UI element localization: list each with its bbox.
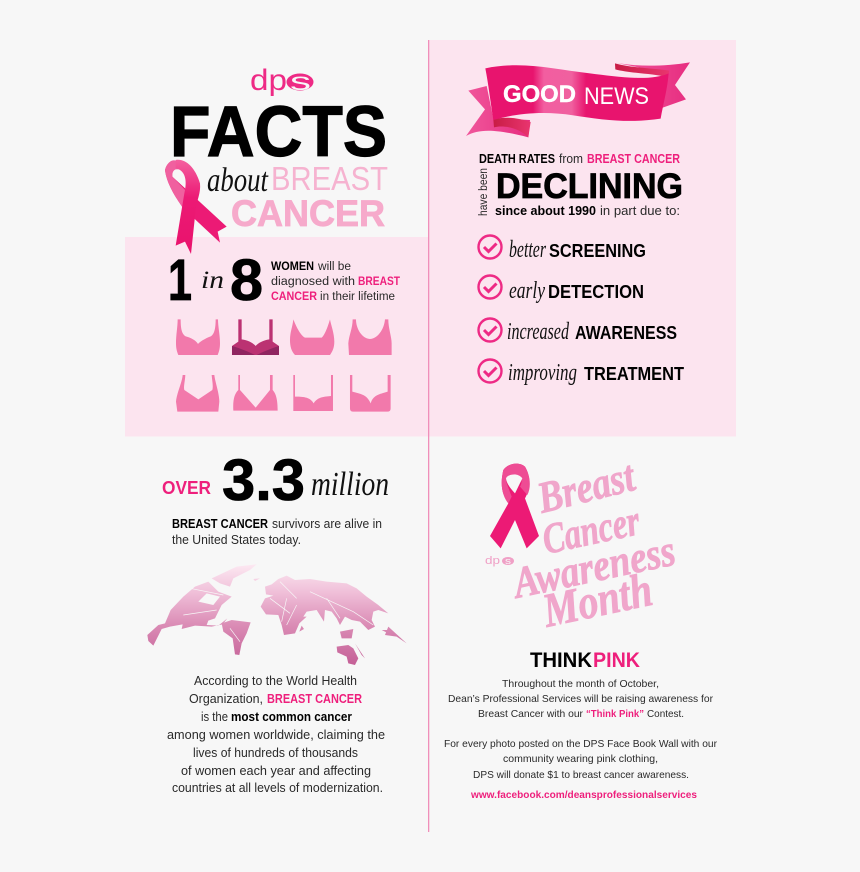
statistic: 1 in 8: 1 <box>168 248 192 313</box>
checklist: early detection: DETECTION <box>548 282 644 302</box>
logo: small dps <box>485 555 514 567</box>
subtitle: about breast cancer: about <box>207 162 269 199</box>
statistic: 1 in 8: 8 <box>230 248 263 313</box>
icon: bra 4 <box>348 319 392 355</box>
text: think pink contest: DPS will donate $1 to breast cancer awareness. <box>473 769 689 781</box>
checklist: early detection <box>478 276 644 304</box>
icon: bra 7 <box>293 375 333 411</box>
text: since about 1990: in part due to: <box>600 203 680 218</box>
lettering: breast cancer awareness month: Awareness <box>506 526 679 608</box>
text: world health organization paragraph <box>167 674 385 795</box>
statistic: 1 in 8: in <box>201 267 224 294</box>
text: think pink contest: Throughout the month of October, <box>502 678 659 690</box>
text: world health organization paragraph: lives of hundreds of thousands <box>193 746 358 760</box>
subtitle: about breast cancer <box>207 160 388 234</box>
icon: bra 3 <box>290 319 334 355</box>
heading: think pink: PINK <box>593 649 640 672</box>
subtitle: about breast cancer: BREAST <box>271 160 388 197</box>
title: FACTS: FACTS <box>170 93 387 172</box>
text: think pink contest: For every photo posted on the DPS Face Book Wall with our <box>444 738 717 750</box>
checklist: improving treatment: TREATMENT <box>584 364 684 384</box>
world map <box>147 564 407 665</box>
banner: good news ribbon: GOOD <box>503 81 576 108</box>
logo: small dps: s <box>505 556 512 566</box>
checklist: increased awareness: increased <box>507 319 570 345</box>
icons: eight bras <box>176 319 392 412</box>
link: facebook url: www.facebook.com/deansprofessionalservices <box>470 789 697 801</box>
text: women will be diagnosed: diagnosed with <box>271 276 355 288</box>
text: think pink contest: Dean’s Professional Services will be raising awareness for <box>448 693 713 705</box>
banner: good news ribbon: NEWS <box>584 83 649 110</box>
text: death rates from breast cancer: BREAST CANCER <box>587 151 681 166</box>
text: world health organization paragraph: According to the World Health <box>194 674 357 688</box>
icon: bra 8 <box>350 375 391 412</box>
vertical divider line <box>428 40 429 832</box>
text: since about 1990 <box>495 203 680 218</box>
text: since about 1990: since about 1990 <box>495 203 596 218</box>
text: women will be diagnosed: in their lifetime <box>320 291 395 303</box>
text: think pink contest <box>444 678 717 781</box>
text: world health organization paragraph: is the <box>201 710 228 724</box>
text: world health organization paragraph: most common cancer <box>231 710 352 724</box>
text: women will be diagnosed <box>271 261 400 303</box>
banner: good news ribbon <box>466 62 690 137</box>
text: think pink contest: Breast Cancer with our <box>478 708 583 720</box>
checklist: better screening: SCREENING <box>549 241 646 261</box>
logo: dps <box>250 64 314 97</box>
panel: good news background <box>428 40 736 436</box>
lettering: breast cancer awareness month: Breast <box>532 451 641 523</box>
heading: think pink: THINK <box>530 649 592 672</box>
text: world health organization paragraph: BREAST CANCER <box>267 692 362 706</box>
text: world health organization paragraph: Organization, <box>189 692 263 706</box>
subtitle: about breast cancer: CANCER <box>231 193 385 234</box>
icon: large pink ribbon <box>165 160 227 254</box>
checklist: increased awareness: AWARENESS <box>575 323 677 343</box>
logo: small dps: dp <box>485 555 500 567</box>
text: death rates from breast cancer <box>479 151 681 166</box>
logo: dps: dp <box>250 64 287 97</box>
text: death rates from breast cancer: from <box>559 151 583 166</box>
icon: bra 1 <box>176 319 220 355</box>
icon: bra 5 <box>176 375 219 412</box>
text: survivors <box>172 517 382 547</box>
checklist: increased awareness <box>478 318 677 345</box>
icon: bra 6 <box>233 375 278 411</box>
heading: DECLINING: DECLINING <box>496 167 683 206</box>
lettering: breast cancer awareness month: Month <box>537 563 657 638</box>
checklist: improving treatment: improving <box>508 360 577 386</box>
text: women will be diagnosed: BREAST <box>358 276 400 288</box>
text: world health organization paragraph: countries at all levels of modernization. <box>172 781 383 795</box>
logo: dps: s <box>290 68 311 96</box>
lettering: breast cancer awareness month <box>506 451 679 638</box>
checklist: improving treatment <box>478 360 684 386</box>
text: women will be diagnosed: CANCER <box>271 291 318 303</box>
checklist: early detection: early <box>509 278 545 304</box>
text: think pink contest: Contest. <box>647 708 684 720</box>
icon: bra 2 <box>232 319 279 355</box>
text: women will be diagnosed: WOMEN <box>271 261 314 273</box>
text: survivors: BREAST CANCER <box>172 517 268 531</box>
statistic: over 3.3 million <box>162 448 389 513</box>
checklist: better screening: better <box>509 237 546 263</box>
panel: 1 in 8 background <box>125 237 428 436</box>
text: survivors: survivors are alive in <box>272 517 382 531</box>
statistic: 1 in 8 <box>168 248 263 313</box>
statistic: over 3.3 million: million <box>311 466 389 503</box>
text: think pink contest: “Think Pink” <box>586 708 644 720</box>
checklist: better screening <box>478 236 646 263</box>
statistic: over 3.3 million: OVER <box>162 478 211 498</box>
text: world health organization paragraph: of women each year and affecting <box>181 764 371 778</box>
text: have been (vertical): have been <box>478 168 490 216</box>
icon: awareness ribbon <box>490 464 539 548</box>
lettering: breast cancer awareness month: Cancer <box>538 497 645 564</box>
text: death rates from breast cancer: DEATH RATES <box>479 151 555 166</box>
text: survivors: the United States today. <box>172 533 301 547</box>
text: women will be diagnosed: will be <box>317 261 351 273</box>
statistic: over 3.3 million: 3.3 <box>222 448 305 513</box>
text: world health organization paragraph: among women worldwide, claiming the <box>167 728 385 742</box>
text: think pink contest: community wearing pink clothing, <box>503 753 658 765</box>
heading: think pink <box>530 649 640 672</box>
